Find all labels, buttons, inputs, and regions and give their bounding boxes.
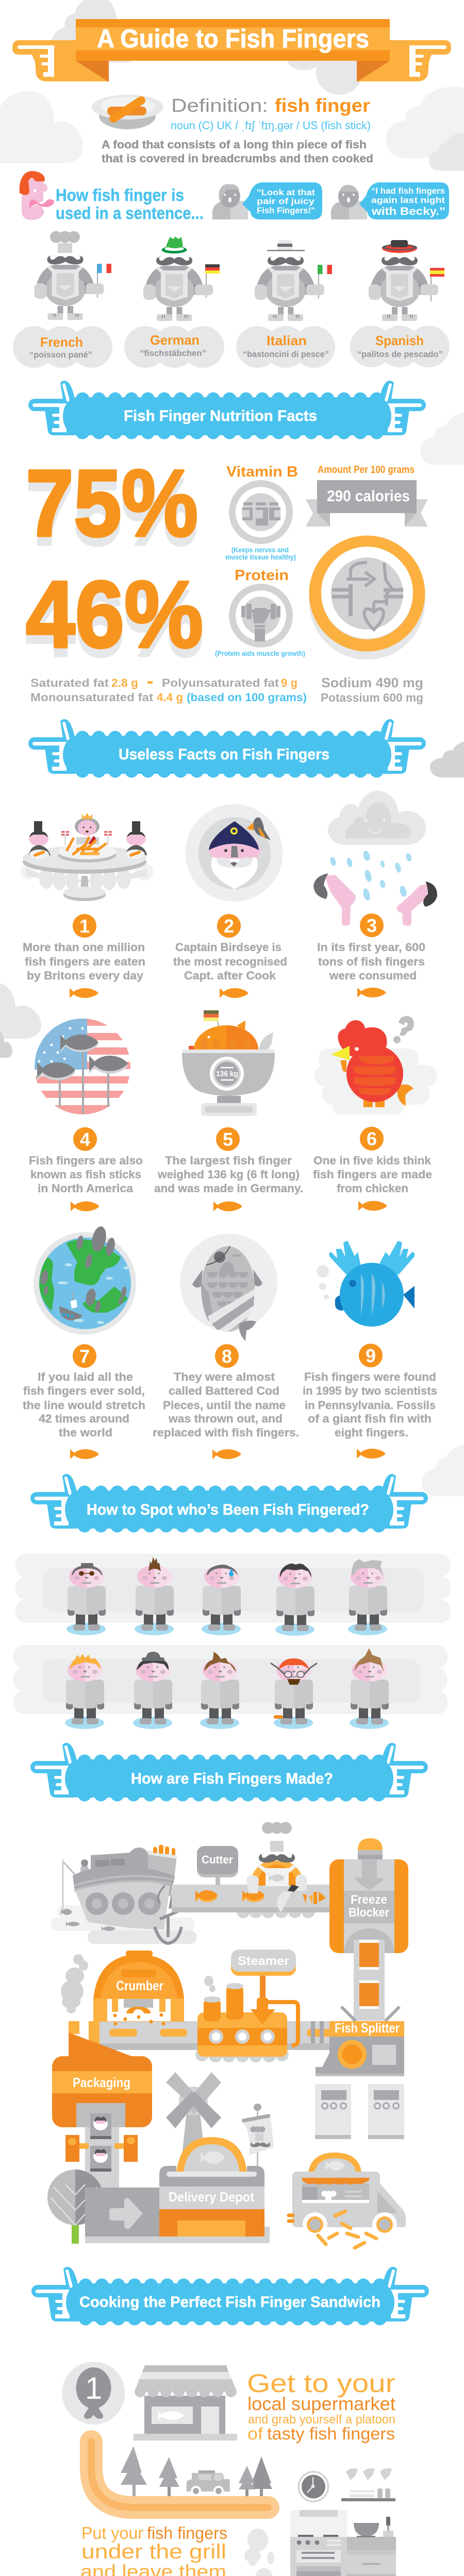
- divider fish row 2: [71, 1201, 387, 1211]
- language cloud: German: [124, 326, 224, 368]
- number 5: 5: [223, 1129, 233, 1150]
- sign: Cutter: Cutter: [202, 1853, 233, 1866]
- definition heading: [171, 95, 370, 116]
- fat breakdown: Monounsaturated fat: [30, 691, 154, 704]
- background cloud: [420, 412, 464, 465]
- language cloud: Italian: “bastoncini di pesce”: [243, 349, 329, 359]
- fact 1 text: More than one million: [23, 941, 145, 954]
- step 1 text: and grab yourself a platoon: [248, 2413, 395, 2427]
- Fish Splitter machine: [316, 2020, 404, 2076]
- fact 5 text: weighed 136 kg (6 ft long): [157, 1168, 300, 1181]
- fact 4 text: Fish fingers are also: [29, 1154, 143, 1167]
- fishing boat: [51, 1845, 197, 1944]
- banner: cooking: [31, 2267, 429, 2321]
- Fish Splitter machine: Fish Splitter: [335, 2020, 400, 2036]
- person looking up right: [397, 882, 437, 926]
- background cloud: [422, 1444, 464, 1496]
- plate of chips: [58, 838, 116, 862]
- person 1: glasses: [67, 1563, 106, 1635]
- fat breakdown: 2.8 g: [111, 676, 138, 689]
- fact 3 text: were consumed: [329, 969, 417, 982]
- sodium and potassium: Sodium 490 mg: [321, 675, 423, 690]
- Crumber machine: [93, 1951, 184, 2026]
- calories ribbon: Amount Per 100 grams: [318, 464, 415, 476]
- line-up backdrop row 1: [15, 1554, 451, 1623]
- illustration 5: giant fish on scales: [182, 1010, 275, 1116]
- person looking up left: [313, 873, 356, 926]
- fact 9 text: [303, 1370, 437, 1439]
- Steamer machine: [195, 1983, 298, 2062]
- fact 8 text: Pieces, until the name: [163, 1399, 286, 1412]
- sign: Steamer: Steamer: [238, 1954, 289, 1968]
- banner: nutrition facts: Fish Finger Nutrition Facts: [124, 408, 317, 425]
- question mark: [399, 1016, 414, 1036]
- line-up backdrop row 2: [13, 1645, 448, 1714]
- number 6: [360, 1127, 384, 1150]
- icon: clock: [298, 2471, 329, 2502]
- illustration 2: Captain Birdseye portrait: [186, 804, 283, 902]
- Packaging building: [52, 2021, 152, 2188]
- car: [187, 2470, 230, 2496]
- bird: [246, 817, 271, 840]
- fact 9 text: of a giant fish fin with: [308, 1412, 432, 1425]
- fact 5 text: and was made in Germany.: [154, 1182, 303, 1195]
- language cloud: Spanish: Spanish: [375, 333, 424, 348]
- smoke puffs: [61, 1954, 216, 2013]
- sign: Steamer: [231, 1950, 296, 1999]
- windmill: [166, 2072, 221, 2169]
- guards with top hats: [29, 821, 147, 855]
- control cabinets: [315, 2084, 404, 2139]
- number 8: [215, 1344, 239, 1368]
- captain packs on belt: [90, 2113, 111, 2172]
- fat breakdown: [30, 676, 307, 704]
- number 2: [217, 914, 241, 938]
- fat breakdown: 4.4 g: [157, 691, 183, 704]
- language cloud: German: German: [150, 332, 200, 348]
- fact 4 text: [29, 1154, 143, 1195]
- language cloud: Spanish: [350, 326, 450, 367]
- fat breakdown: Polyunsaturated fat: [162, 676, 279, 689]
- fact 6 text: fish fingers are made: [313, 1168, 432, 1181]
- fact 5 text: [154, 1154, 303, 1195]
- banner: useless facts: [28, 719, 426, 774]
- banner: how made: How are Fish Fingers Made?: [131, 1770, 333, 1787]
- step 1 text: local supermarket: [247, 2393, 395, 2414]
- how used heading: How fish finger is: [56, 185, 184, 205]
- fact 6 text: [313, 1154, 432, 1195]
- language cloud: French: “poisson pané”: [29, 350, 92, 360]
- banner: how made: [30, 1743, 428, 1798]
- delivery depot: Delivery Depot: [169, 2189, 254, 2205]
- background cloud: [430, 740, 464, 777]
- fact 7 text: If you laid all the: [38, 1370, 133, 1383]
- fact 2 text: [173, 941, 287, 982]
- chute with frozen fish fingers: [341, 1940, 400, 2021]
- chef: Spanish: [369, 240, 444, 321]
- fact 1 text: [23, 941, 145, 982]
- title ribbon with pointing hands: [12, 19, 451, 82]
- fact 8 text: was thrown out, and: [168, 1412, 283, 1425]
- step 2 text: [80, 2523, 227, 2576]
- banner: cooking: Cooking the Perfect Fish Finger Sandwich: [79, 2294, 380, 2311]
- icon: plate of fish fingers: [92, 95, 163, 129]
- number 6: 6: [367, 1128, 377, 1149]
- language cloud: French: French: [40, 334, 83, 350]
- number 3: [360, 913, 384, 937]
- fact 9 text: in Pennsylvania. Fossils: [305, 1399, 436, 1412]
- number 1: [73, 914, 96, 938]
- person 10: tan spiky: [350, 1648, 389, 1729]
- number 2: 2: [224, 916, 234, 937]
- speech quote 1: [257, 188, 315, 215]
- fact 5 text: The largest fish finger: [165, 1154, 292, 1167]
- fact 7 text: fish fingers ever sold,: [23, 1384, 145, 1397]
- fat breakdown: Saturated fat: [30, 676, 109, 689]
- person 2: mohawk: [135, 1557, 174, 1635]
- fat breakdown: 9 g: [281, 676, 297, 689]
- step 1 text: of: [247, 2424, 263, 2443]
- definition text: [102, 138, 373, 165]
- lower conveyor: [99, 2021, 333, 2050]
- fact 9 text: Fish fingers were found: [304, 1370, 436, 1383]
- how used heading: used in a sentence...: [56, 204, 204, 223]
- Freeze Blocker machine: Freeze: [351, 1893, 387, 1907]
- language cloud: French: [13, 326, 112, 368]
- fact 3 text: [317, 941, 425, 982]
- fat breakdown: (based on 100 grams): [187, 691, 307, 704]
- chef with knife: [246, 1822, 307, 1912]
- sodium and potassium: [321, 675, 423, 704]
- person 8: brown quiff: [200, 1652, 239, 1729]
- banner: how to spot: How to Spot who’s Been Fish Fingered?: [87, 1501, 369, 1518]
- chef: Italian: [255, 240, 332, 321]
- sodium and potassium: Potassium 600 mg: [321, 691, 423, 704]
- stat: 75 percent: 75%: [26, 459, 198, 565]
- number 9: 9: [366, 1345, 376, 1366]
- tree: [47, 2170, 103, 2244]
- fact 3 text: tons of fish fingers: [318, 955, 425, 968]
- step 2 text: under the grill: [81, 2540, 226, 2563]
- little ship: [59, 1292, 82, 1320]
- banner: useless facts: Useless Facts on Fish Fingers: [119, 746, 329, 763]
- calories ribbon: [306, 464, 428, 527]
- fact 8 text: They were almost: [174, 1370, 275, 1383]
- protein block: (Protein aids muscle growth): [215, 649, 305, 657]
- person 9: laughing redhead: [271, 1658, 317, 1729]
- step 1 badge: 1: [85, 2371, 102, 2405]
- trees and car: [121, 2446, 272, 2496]
- person 7: bowler hat: [133, 1652, 172, 1729]
- fact 9 text: eight fingers.: [335, 1426, 408, 1439]
- icon: dumbbell fist: [229, 584, 293, 648]
- step 1 text: Get to your: [247, 2369, 395, 2398]
- step 2 text: fish fingers: [147, 2523, 227, 2543]
- steam puffs: [244, 2529, 274, 2576]
- conveyor belt top: [172, 1885, 330, 1918]
- delivery depot: [85, 2137, 270, 2243]
- fish finger van: [289, 2153, 406, 2248]
- scale reading: 136 kg: [216, 1070, 238, 1078]
- speech person and bubble 1: [212, 182, 322, 219]
- illustration 7: globe with fish and ship: [34, 1225, 136, 1334]
- definition heading: Definition:: [171, 95, 268, 116]
- step 1 badge: [62, 2362, 125, 2425]
- step 1 text: [247, 2369, 395, 2443]
- pronunciation: noun (C) UK / ˌfɪʃ ˈfɪŋ.gər / US (fish stick): [171, 119, 371, 132]
- number 5: [216, 1127, 240, 1151]
- fact 8 text: called Battered Cod: [169, 1384, 279, 1397]
- person 3: sweat drop: [202, 1565, 241, 1635]
- background clouds left: [0, 982, 41, 1058]
- divider fish row 3: [70, 1449, 386, 1459]
- fact 1 text: fish fingers are eaten: [25, 955, 145, 968]
- speech quote 2: with Becky.”: [371, 206, 445, 217]
- fact 4 text: in North America: [38, 1182, 134, 1195]
- supermarket: [134, 2365, 237, 2441]
- how used heading: [56, 185, 204, 223]
- speech quote 1: Fish Fingers!": [257, 206, 315, 215]
- character head with moustache: [20, 171, 54, 220]
- vitamin B block: Vitamin B: [226, 464, 298, 480]
- icon: nerve target: [229, 480, 293, 544]
- fact 8 text: replaced with fish fingers.: [153, 1426, 299, 1439]
- language cloud: Italian: Italian: [267, 333, 307, 348]
- illustration 1: queen's banquet: [21, 813, 153, 901]
- background clouds top: [0, 0, 464, 171]
- person 6: orange spiky: [65, 1654, 104, 1729]
- illustration 9: blue fish with hands: [317, 1241, 415, 1327]
- fact 7 text: the world: [59, 1426, 112, 1439]
- fact 1 text: by Britons every day: [27, 969, 144, 982]
- speech person and bubble 2: [331, 182, 449, 219]
- speech quote 1: "Look at that: [257, 188, 315, 197]
- kitchen shelf: [341, 2468, 395, 2501]
- illustration 8: fish with eyepatch: [180, 1233, 277, 1341]
- title: A Guide to Fish Fingers: [97, 24, 369, 53]
- oven and counter: [290, 2510, 396, 2576]
- speech quote 2: again last night: [371, 195, 445, 205]
- fact 2 text: the most recognised: [173, 955, 287, 968]
- Crumber machine: Crumber: [116, 1978, 163, 1993]
- stat: 75 percent: 75%: [26, 450, 198, 556]
- fact 2 text: Captain Birdseye is: [175, 941, 281, 954]
- fact 3 text: In its first year, 600: [317, 941, 425, 954]
- fact 4 text: known as fish sticks: [30, 1168, 141, 1181]
- speech quote 2: [371, 186, 445, 217]
- divider fish row 1: [70, 988, 386, 998]
- fact 2 text: Capt. after Cook: [184, 969, 276, 982]
- queen: [75, 813, 100, 853]
- banner: how to spot: [30, 1474, 428, 1529]
- fact 7 text: the line would stretch: [23, 1399, 145, 1412]
- definition heading: fish finger: [275, 95, 370, 116]
- language cloud: Spanish: “palitos de pescado”: [357, 349, 443, 359]
- illustration 4: US flag with fish on sticks: [35, 1019, 130, 1114]
- language cloud: Italian: [236, 326, 335, 368]
- number 4: [73, 1127, 97, 1151]
- fact 8 text: [153, 1370, 299, 1439]
- number 4: 4: [80, 1129, 90, 1150]
- fact 6 text: One in five kids think: [313, 1154, 432, 1167]
- road segment 1: [91, 2442, 268, 2507]
- fact 6 text: from chicken: [337, 1182, 408, 1195]
- stat: 46 percent: 46%: [26, 561, 203, 667]
- flag with chef logo: [242, 2104, 274, 2168]
- person 4: black hair: [275, 1564, 314, 1636]
- illustration 3: raining fish: [313, 791, 437, 926]
- speech quote 1: pair of juicy: [257, 196, 315, 206]
- speech quote 2: “I had fish fingers: [371, 186, 445, 196]
- step 2 text: Put your: [81, 2523, 143, 2543]
- definition text: that is covered in breadcrumbs and then cooked: [102, 152, 373, 165]
- protein block: Protein: [235, 567, 289, 584]
- Freeze Blocker machine: [329, 1838, 408, 1953]
- chef: German: [143, 236, 220, 321]
- scattered fish fingers: [289, 2211, 376, 2248]
- number 7: 7: [79, 1346, 90, 1367]
- illustration 6: confused chicken: [314, 1016, 437, 1114]
- calories ribbon: 290 calories: [327, 487, 410, 505]
- step 1 text: tasty fish fingers: [267, 2424, 395, 2443]
- vitamin B block: [225, 464, 298, 561]
- chef: French: [34, 231, 111, 320]
- number 3: 3: [367, 915, 377, 936]
- number 1: 1: [79, 916, 90, 937]
- fish finger on floor: [274, 1715, 283, 1719]
- sign: Cutter: [197, 1846, 238, 1886]
- fact 9 text: in 1995 by two scientists: [303, 1384, 437, 1397]
- number 7: [73, 1344, 96, 1368]
- union jack flags: [61, 831, 112, 845]
- number 9: [359, 1344, 383, 1367]
- definition text: A food that consists of a long thin piece of fish: [102, 138, 367, 151]
- fact 7 text: [23, 1370, 145, 1439]
- number 8: 8: [222, 1346, 232, 1367]
- Freeze Blocker machine: Blocker: [349, 1906, 389, 1920]
- Packaging building: Packaging: [73, 2075, 130, 2090]
- vitamin B block: (Keeps nerves and: [231, 546, 289, 554]
- vitamin B block: muscle tissue healthy): [225, 553, 296, 561]
- fact 7 text: 42 times around: [39, 1412, 129, 1425]
- stat: 46 percent: 46%: [26, 570, 203, 676]
- person 5: grey hair: [348, 1559, 387, 1635]
- side plates: [29, 850, 145, 859]
- banner: nutrition facts: [28, 381, 426, 435]
- icon: head and heart ring: [309, 536, 425, 659]
- protein block: [215, 567, 305, 657]
- language cloud: German: “fischstäbchen”: [140, 348, 206, 358]
